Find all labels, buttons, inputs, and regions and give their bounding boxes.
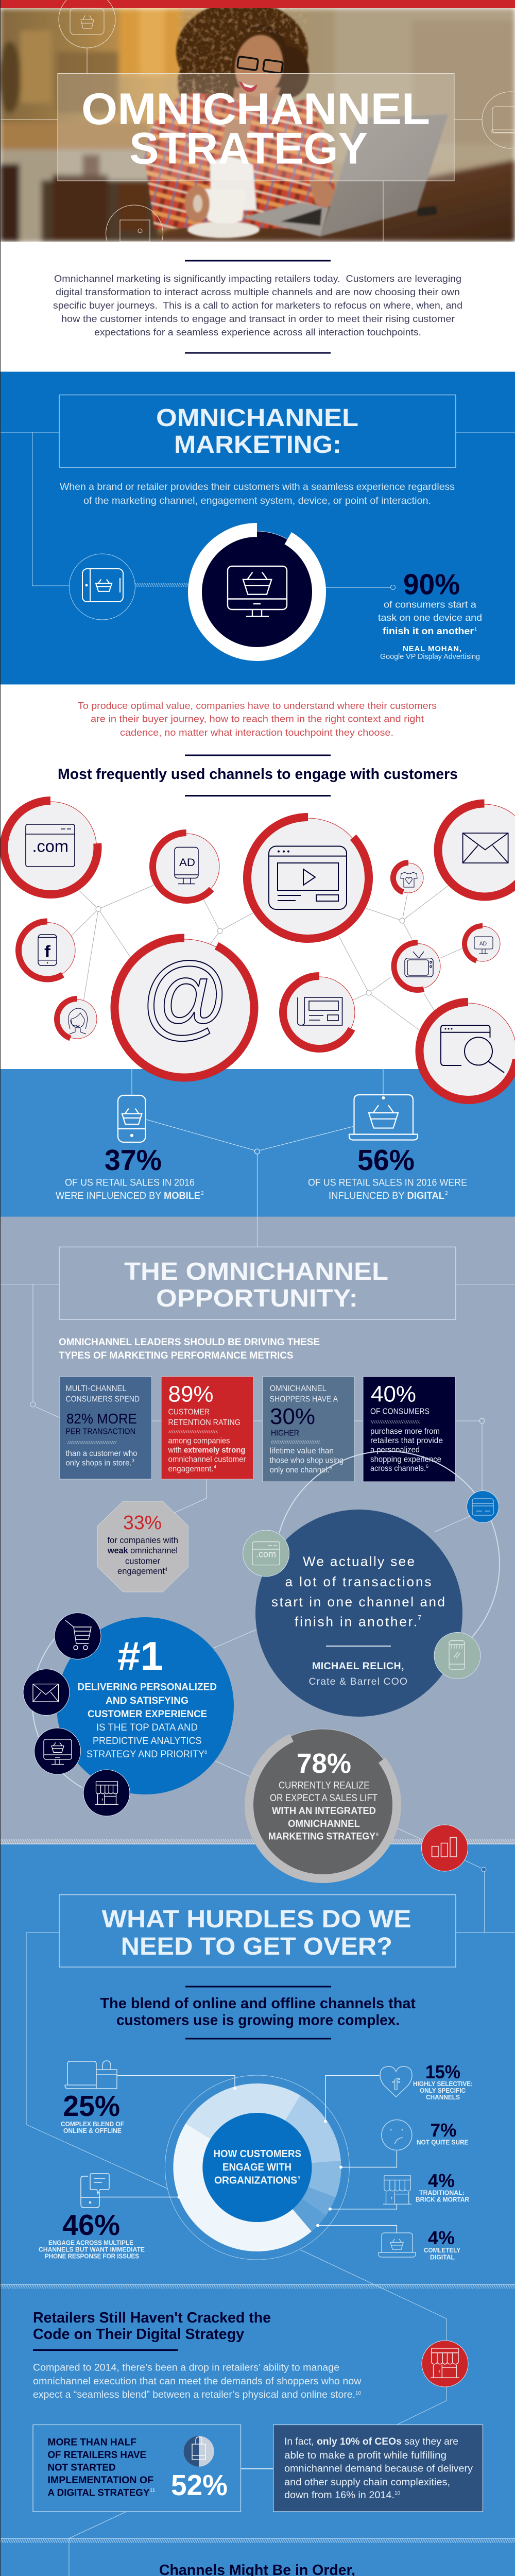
decorative device circles on photo [0,0,515,242]
text block: optimal value [78,700,437,738]
stat: 90 percent: 90% [403,568,460,601]
stat: 90 percent: 1 [474,626,477,632]
donut chart: how customers engage: ENGAGE WITH [222,2162,291,2173]
bubble: email [434,800,515,901]
icon: red store [422,2341,468,2387]
heading box: THE OMNICHANNEL [124,1258,388,1285]
stat: 15 percent [380,2061,473,2101]
metrics heading: TYPES OF MARKETING PERFORMANCE METRICS [59,1350,294,1361]
stat: 46 percent: ENGAGE ACROSS MULTIPLE [48,2239,133,2247]
text block: retailers digital strategy: omnichannel execution that can meet the demands of shoppers who now [33,2376,362,2387]
bubble: digital ad [139,819,234,914]
bubble: small digital ad: AD [479,941,487,947]
callout: only 10 percent of CEOs: omnichannel demand because of delivery [284,2463,473,2474]
icon: laptop with basket [349,1095,418,1140]
text block: intro: digital transformation to interact across multiple channels and are now choosing their own [56,286,460,297]
icon: red bar chart [421,1825,468,1871]
heading box: MARKETING: [174,431,341,459]
stat: 46 percent [39,2174,145,2260]
card: 89 percent retention [161,1377,253,1479]
card: 30 percent higher [263,1377,354,1482]
glasses [237,56,283,73]
card: 82 percent more: CONSUMERS SPEND [66,1395,140,1403]
heading box [59,395,456,467]
bubble: digital ad: AD [179,857,195,869]
stat: 90 percent: task on one device and [378,613,482,623]
callout: number one priority: #1 [117,1633,163,1679]
callout: 52 percent: 52% [171,2469,228,2502]
stat: 15 percent: 15% [425,2061,460,2082]
panel: omnichannel marketing definition [0,372,515,684]
callout: only 10 percent of CEOs [273,2425,483,2512]
heading box [59,1247,456,1319]
card: 40 percent of consumers: across channels. [370,1464,426,1473]
callout: 33 percent octagon: customer [125,1557,161,1566]
icon: .com circle [243,1530,289,1577]
stat: 90 percent: finish it on another [383,626,474,636]
quote bubble: Michael Relich: finish in another. [295,1614,417,1630]
card: 30 percent higher: only one channel. [270,1466,330,1475]
stat: 25 percent: 25% [63,2090,120,2123]
card: 82 percent more: than a customer who [66,1449,137,1458]
heading: blend of channels: customers use is growing more complex. [116,2012,400,2029]
heading box: OMNICHANNEL [156,404,358,432]
callout: 52 percent: A DIGITAL STRATEGY [47,2487,149,2499]
bubble: video [222,792,394,964]
text block: optimal value: are in their buyer journey, how to reach them in the right context and right [91,714,424,724]
callout: 33 percent octagon: for companies with [107,1536,178,1545]
card: 30 percent higher: 5 [330,1465,332,1470]
bubble: small digital ad [459,921,506,967]
heading: blend of channels [100,1986,416,2039]
stat: 90 percent: Google VP Display Advertising [380,652,480,661]
card: 40 percent of consumers: OF CONSUMERS [370,1408,430,1416]
stat: 15 percent: f [392,2076,400,2093]
callout: 78 percent: OMNICHANNEL [288,1819,360,1829]
heading: blend of channels: The blend of online and offline channels that [100,1995,416,2012]
bubble: newspaper [270,963,368,1061]
card: 82 percent more: MULTI-CHANNEL [66,1384,127,1393]
callout: 78 percent: MARKETING STRATEGY [268,1832,375,1842]
stat: 90 percent: of consumers start a [384,600,477,610]
quote bubble: Michael Relich: Crate & Barrel COO [309,1676,407,1687]
donut chart: how customers engage: ORGANIZATIONS [214,2175,297,2186]
stat: 4 percent traditional: BRICK & MORTAR [416,2196,470,2203]
callout: 33 percent octagon: 4 [165,1567,167,1572]
card: 82 percent more: 3 [132,1458,134,1463]
card: 82 percent more [60,1377,152,1479]
callout: 78 percent: 8 [376,1832,379,1837]
icon: store [83,1770,130,1816]
bubble: facebook phone: f [44,942,50,961]
bubble: call center headset [51,993,104,1045]
icon: envelope [23,1669,70,1716]
stat: 46 percent: 46% [62,2209,120,2242]
text block: optimal value: To produce optimal value, companies have to understand where their customers [78,700,437,711]
title box: STRATEGY [129,124,368,173]
callout: 52 percent: IMPLEMENTATION OF [47,2475,153,2486]
card: 30 percent higher: lifetime value than [270,1447,334,1455]
stat: 37 percent mobile: 2 [201,1191,204,1196]
bubble: at sign email [90,913,279,1102]
card: 89 percent retention: RETENTION RATING [168,1418,241,1427]
icon: .com circle: .com [256,1549,276,1559]
card: 40 percent of consumers: shopping experience [370,1455,441,1464]
heading box: hurdles: NEED TO GET OVER? [121,1933,392,1960]
quote bubble: Michael Relich: MICHAEL RELICH, [312,1660,404,1672]
callout: 52 percent: NOT STARTED [47,2462,115,2473]
heading: most frequently used channels [58,754,458,796]
callout: number one priority [23,1613,234,1816]
card: 40 percent of consumers: 40% [371,1381,416,1406]
stat: 46 percent: CHANNELS BUT WANT IMMEDIATE [39,2246,145,2253]
stat: 56 percent digital: INFLUENCED BY DIGITAL [329,1191,444,1201]
card: 89 percent retention: 4 [214,1464,216,1469]
callout: only 10 percent of CEOs: down from 16% in 2014. [284,2489,394,2501]
text block: retailers digital strategy: Compared to 2014, there’s been a drop in retailers’ ability to manage [33,2363,339,2374]
callout: only 10 percent of CEOs: In fact, only 10% of CEOs say they are [284,2436,458,2447]
hatch strip [0,2538,515,2543]
callout: 78 percent: CURRENTLY REALIZE [279,1780,370,1791]
bubble: t-shirt [389,858,428,897]
card: 40 percent of consumers: a personalized [370,1446,420,1454]
donut chart: how customers engage [160,2070,355,2265]
title box: OMNICHANNEL [81,84,430,134]
quote bubble: Michael Relich: a lot of transactions [285,1574,431,1589]
panel: mobile and digital retail stats [56,1069,467,1247]
connector lines [26,1860,515,2576]
stat: 7 percent [382,2120,469,2150]
stat: 15 percent: ONLY SPECIFIC [420,2087,466,2094]
donut chart: how customers engage: 9 [298,2175,300,2180]
card: 30 percent higher: OMNICHANNEL [270,1384,327,1393]
text block: optimal value: cadence, no matter what interaction touchpoint they choose. [120,727,393,738]
hatch connector [135,583,188,587]
icon: tablet with basket [69,554,135,620]
stat: 4 percent traditional [383,2170,470,2204]
stat: 15 percent: HIGHLY SELECTIVE: [413,2080,473,2088]
callout: 52 percent: 11 [150,2488,156,2494]
connector to stat [326,587,391,588]
icon: monitor basket [35,1728,81,1774]
card: 89 percent retention: engagement. [168,1465,213,1473]
stat: 25 percent: ONLINE & OFFLINE [63,2127,122,2134]
stat: 37 percent mobile: WERE INFLUENCED BY MOBILE [56,1191,200,1201]
text block: intro: expectations for a seamless experience across all interaction touchpoints. [94,327,421,337]
connector lines [0,432,515,586]
quote bubble: Michael Relich [243,1451,500,1717]
donut callout lines [99,2076,397,2233]
definition text: of the marketing channel, engagement system, device, or point of interaction. [83,496,431,506]
stat: 56 percent digital [308,1144,467,1201]
callout: only 10 percent of CEOs: 10 [394,2490,401,2496]
stat: 56 percent digital: 56% [357,1144,415,1177]
card: 89 percent retention: 89% [168,1381,213,1406]
card: 30 percent higher: 30% [270,1404,315,1429]
lips [239,81,258,92]
bottom hatch strip [0,1839,515,1843]
metrics heading [59,1337,320,1361]
callout: 78 percent: WITH AN INTEGRATED [272,1806,376,1817]
callout: number one priority: STRATEGY AND PRIORITY [87,1749,204,1760]
card: 40 percent of consumers: 6 [426,1464,428,1469]
callout: 33 percent octagon: engagement [117,1567,165,1576]
callout: 33 percent octagon [97,1501,188,1592]
chart: channel bubble network [0,792,515,1108]
panel: hurdles [0,1701,515,2576]
callout: 78 percent: 78% [297,1748,351,1779]
stat: 90 percent [378,568,482,661]
stat: 4 percent digital: COMLETELY [424,2246,460,2254]
photo of woman at laptop [0,1,515,242]
text block: retailers digital strategy [33,2310,362,2400]
network connectors [71,885,462,1030]
bubble: website .com [0,796,101,899]
stat: 37 percent mobile: 37% [105,1144,162,1177]
callout: number one priority: DELIVERING PERSONALIZED [77,1682,217,1692]
bubble: search [411,994,515,1108]
stat: 7 percent: NOT QUITE SURE [417,2138,469,2146]
text block: intro: specific buyer journeys. This is a call to action for marketers to refocus on where, when, and [53,300,462,311]
donut chart: how customers engage: HOW CUSTOMERS [213,2148,301,2160]
definition text: When a brand or retailer provides their customers with a seamless experience regardless [60,482,455,493]
callout: 33 percent octagon: weak omnichannel [107,1546,178,1555]
text block: retailers digital strategy: Code on Their Digital Strategy [33,2326,244,2343]
stat: 56 percent digital: 2 [445,1191,448,1196]
icon: cart [55,1613,101,1659]
bubble: TV [389,937,447,995]
icon: phone store circle [434,1632,480,1679]
icon: shopping bag circle [183,2436,214,2467]
bubble: at sign email: @ [141,943,230,1048]
panel: lower blue band stats background [0,1069,515,1217]
callout: number one priority: CUSTOMER EXPERIENCE [88,1709,207,1720]
heading box: hurdles: WHAT HURDLES DO WE [102,1906,411,1933]
stat: 4 percent digital [379,2227,460,2261]
stat: 46 percent: PHONE RESPONSE FOR ISSUES [45,2252,139,2260]
callout: 52 percent [33,2425,241,2512]
card: 89 percent retention: with extremely strong [168,1446,245,1455]
heading: most frequently used channels: Most frequently used channels to engage with customers [58,766,458,783]
callout: 33 percent octagon: 33% [123,1512,162,1534]
text block: intro: how the customer intends to engage and transact in order to meet their rising customer [61,313,455,324]
stat: 56 percent digital: OF US RETAIL SALES IN 2016 WERE [308,1178,467,1189]
connector lines [0,1217,515,1840]
text block: retailers digital strategy: expect a “seamless blend” between a retailer’s physical and online store. [33,2389,355,2400]
stat: 4 percent digital: DIGITAL [430,2253,455,2261]
callout: number one priority: IS THE TOP DATA AND [96,1722,198,1733]
card: 30 percent higher: those who shop using [270,1456,344,1465]
icon: phone with basket [118,1095,145,1142]
card: 82 percent more: only shops in store. [66,1459,132,1467]
text block: intro: Omnichannel marketing is significantly impacting retailers today. Customers are leveraging [54,273,461,284]
card: 82 percent more: 82% MORE [66,1411,137,1427]
text block: retailers digital strategy: Retailers Still Haven't Cracked the [33,2310,271,2326]
stat: 37 percent mobile: OF US RETAIL SALES IN 2016 [65,1178,195,1189]
stat: 15 percent: CHANNELS [426,2093,460,2101]
stat: 25 percent [61,2061,124,2134]
card: 89 percent retention: CUSTOMER [168,1408,210,1417]
quote bubble: Michael Relich: start in one channel and [271,1594,445,1609]
stat: 37 percent mobile [56,1144,204,1201]
card: 30 percent higher: HIGHER [271,1429,299,1437]
callout: 52 percent: MORE THAN HALF [47,2437,136,2448]
quote bubble: Michael Relich: We actually see [303,1554,415,1569]
page left edge line [0,0,1,2576]
stat: 25 percent: COMPLEX BLEND OF [61,2120,124,2128]
callout: 78 percent [219,1701,426,1908]
callout: 52 percent: OF RETAILERS HAVE [47,2449,146,2461]
heading box: hurdles [59,1895,456,1967]
quote bubble: Michael Relich: 7 [418,1614,421,1621]
stat: 4 percent traditional: TRADITIONAL: [419,2189,465,2196]
card: 30 percent higher: SHOPPERS HAVE A [270,1395,338,1403]
text block: intro [53,260,462,353]
callout: 78 percent: OR EXPECT A SALES LIFT [270,1793,377,1804]
stat: 90 percent: NEAL MOHAN, [403,645,461,653]
card: 82 percent more: PER TRANSACTION [66,1428,135,1436]
panel: hero photo and title [0,0,515,242]
stat: 4 percent traditional: 4% [428,2170,455,2191]
callout: number one priority: PREDICTIVE ANALYTICS [93,1736,202,1747]
panel: the omnichannel opportunity [0,1217,515,1844]
card: 40 percent of consumers [363,1377,455,1482]
callout: only 10 percent of CEOs: able to make a profit while fulfilling [284,2450,447,2461]
stat: 4 percent digital: 4% [428,2227,455,2248]
metrics heading: OMNICHANNEL LEADERS SHOULD BE DRIVING THESE [59,1337,320,1348]
callout: number one priority: AND SATISFYING [106,1696,188,1706]
bubble: facebook phone [8,910,87,990]
callout: number one priority: 8 [204,1750,207,1755]
top red bar [0,0,515,8]
card: 89 percent retention: omnichannel customer [168,1455,246,1464]
connectors [132,1069,383,1247]
title box [58,73,454,181]
definition text [60,482,455,506]
heading box: OPPORTUNITY: [156,1285,358,1312]
icon: card circle [467,1491,499,1523]
card: 89 percent retention: among companies [168,1437,230,1446]
hatch strip [0,2284,515,2289]
card: 40 percent of consumers: purchase more from [370,1427,440,1436]
card: 40 percent of consumers: retailers that provide [370,1436,443,1445]
bubble: website .com: .com [32,837,68,855]
callout: only 10 percent of CEOs: and other supply chain complexities, [284,2477,450,2488]
stat: 7 percent: 7% [431,2120,456,2141]
text block: retailers digital strategy: 10 [355,2391,362,2396]
donut: 90 percent with monitor icon [172,507,342,677]
